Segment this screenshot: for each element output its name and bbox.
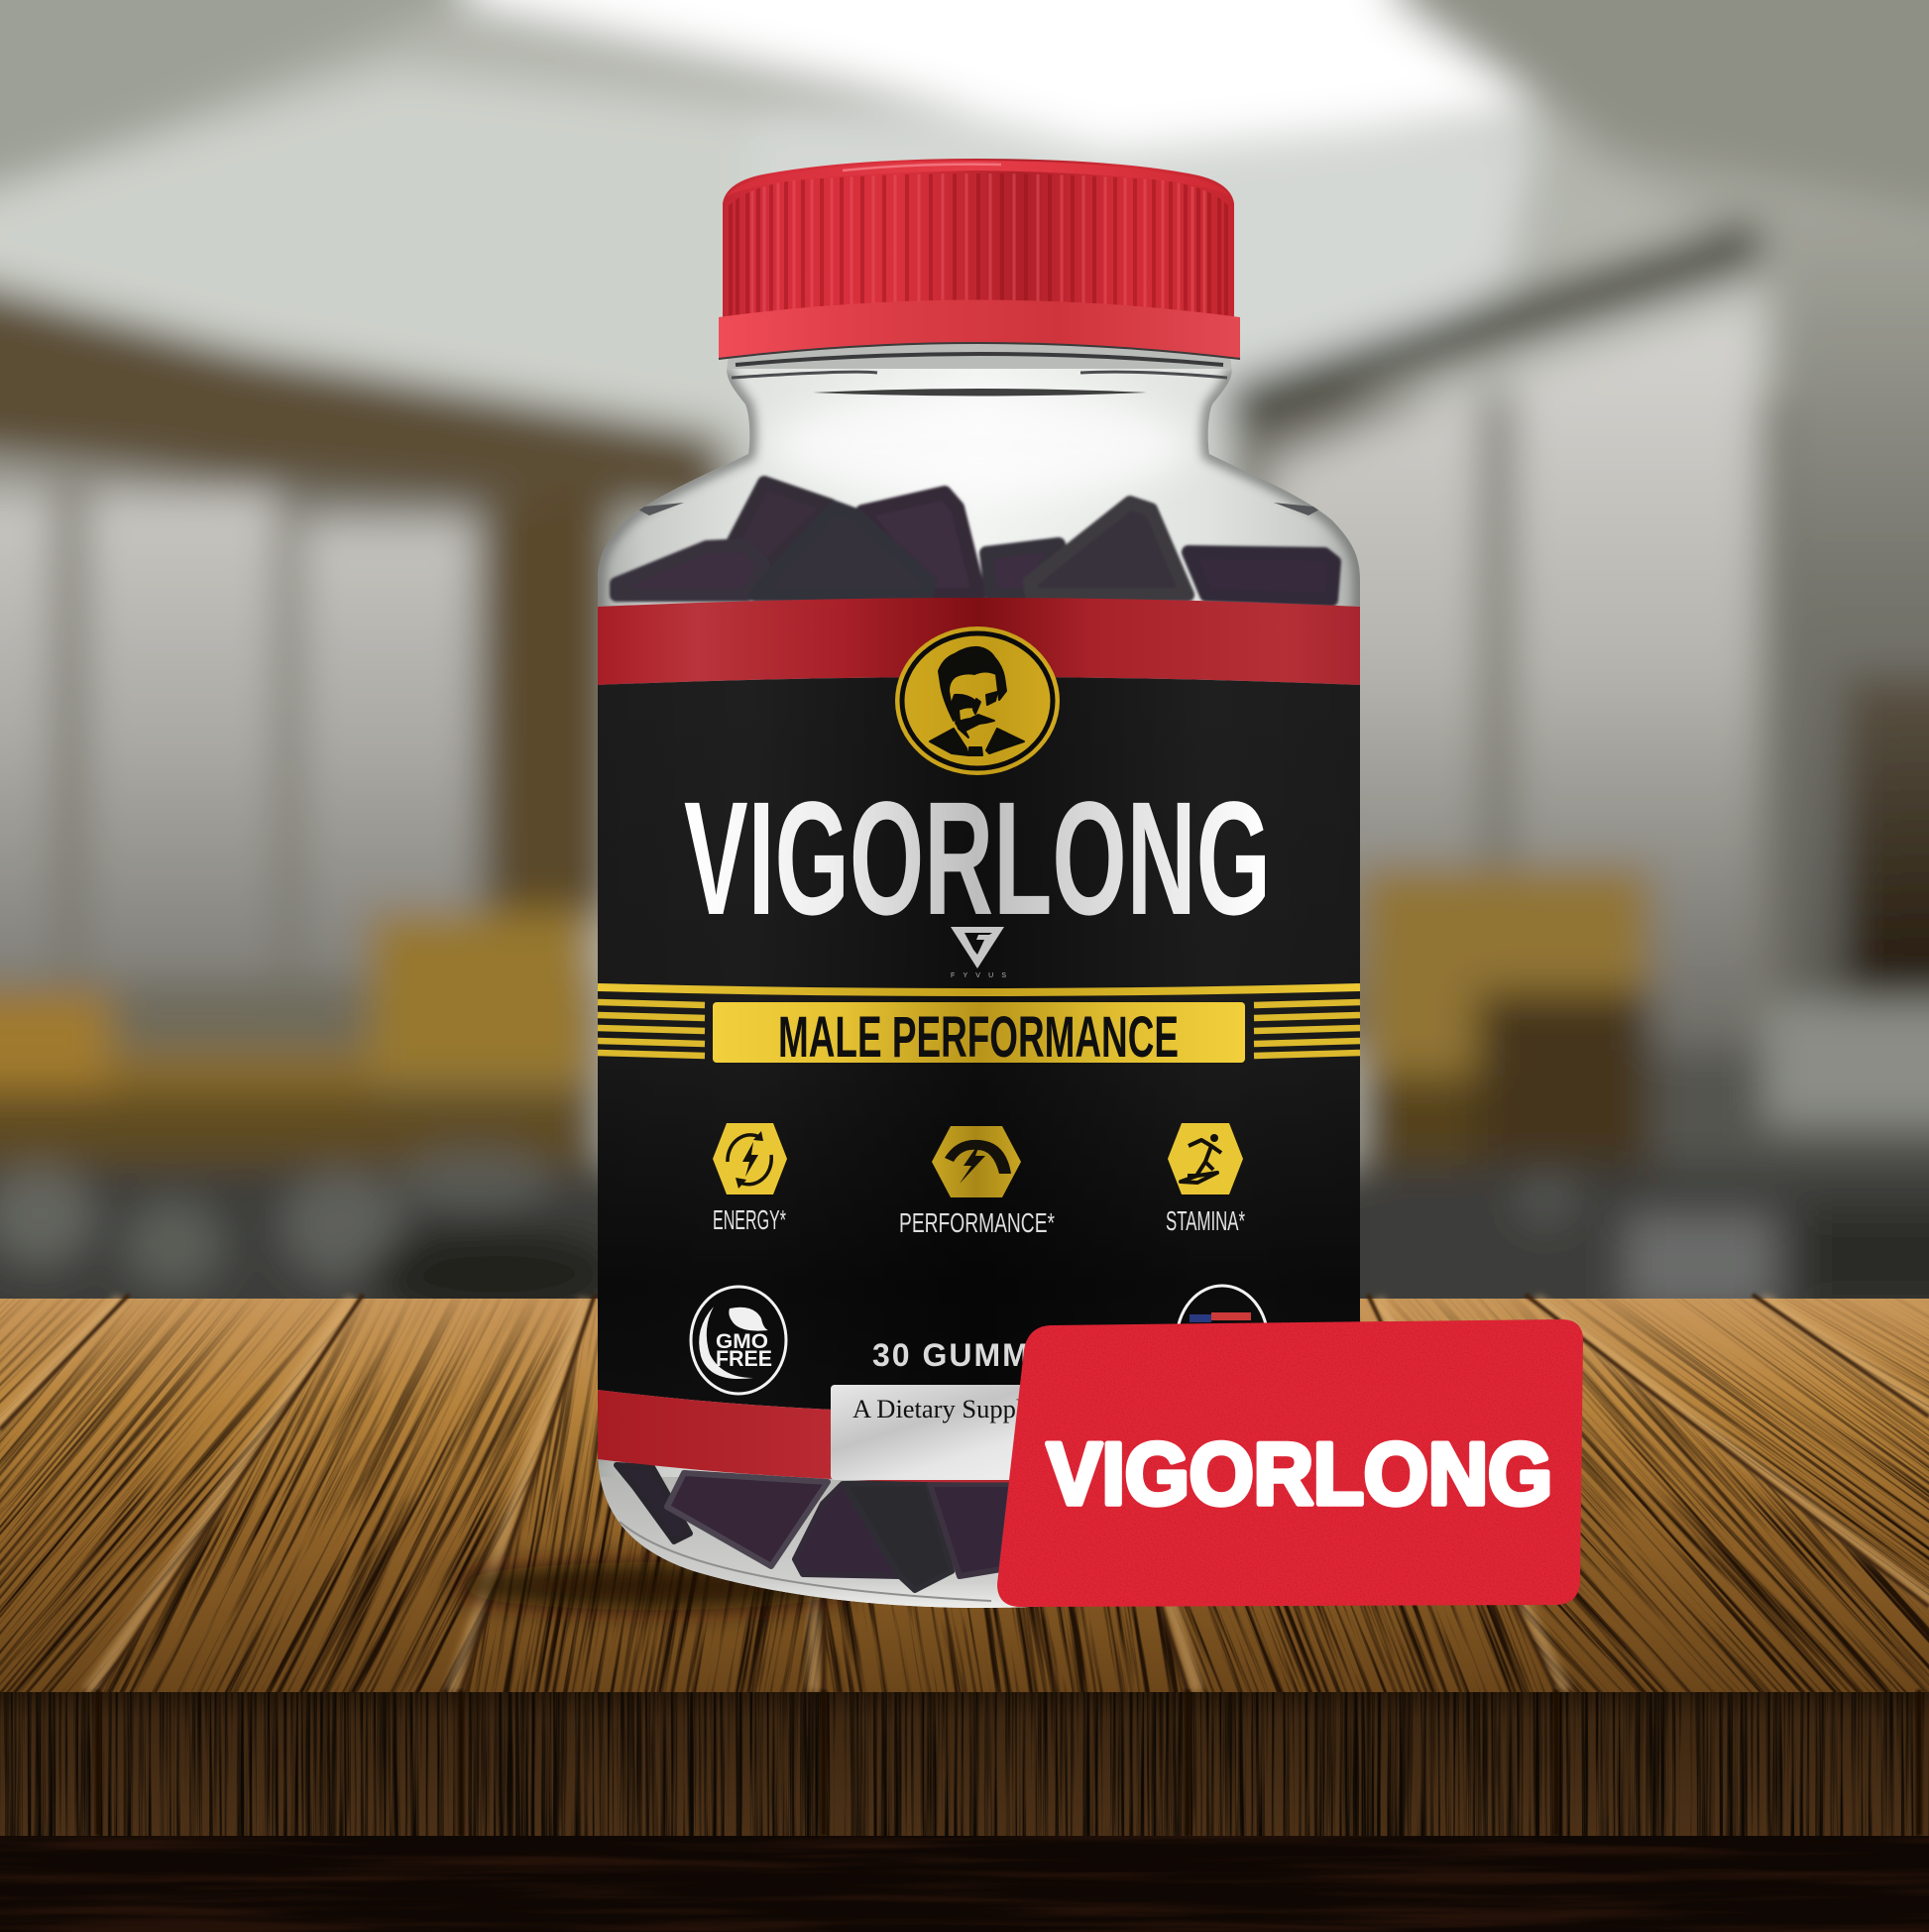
bottle xyxy=(598,159,1360,1608)
badge: GMO free xyxy=(691,1287,786,1394)
bottle shadow on table xyxy=(451,1562,857,1610)
red screw cap xyxy=(719,159,1240,359)
count text: 30 GUMMIES xyxy=(872,1337,1087,1373)
label sheen xyxy=(598,677,1360,1414)
brand title: VIGORLONG xyxy=(684,767,1271,949)
male performance banner: MALE PERFORMANCE xyxy=(778,1005,1179,1070)
white supplement-facts panel xyxy=(831,1385,1128,1480)
medallion: moustached man xyxy=(895,626,1060,775)
red brand card xyxy=(991,1313,1586,1611)
male performance banner xyxy=(713,1002,1245,1070)
label: red top band xyxy=(598,598,1360,685)
label: black body xyxy=(598,677,1360,1414)
table front edge xyxy=(0,1690,1929,1836)
gummies top xyxy=(617,483,1334,600)
dark area below table xyxy=(0,1836,1929,1932)
gummies bottom xyxy=(617,1465,1011,1590)
icon: energy xyxy=(713,1123,787,1194)
wooden table top xyxy=(0,1295,1929,1695)
badge: GMO free: FREE xyxy=(716,1346,772,1371)
label: performance: PERFORMANCE* xyxy=(899,1207,1055,1238)
card wordmark: VIGORLONG xyxy=(1047,1424,1552,1523)
badge: GMO free: GMO xyxy=(716,1330,768,1353)
icon: stamina xyxy=(1168,1123,1243,1194)
FYVUS logo xyxy=(951,927,1006,979)
label: energy: ENERGY* xyxy=(713,1204,786,1235)
badge: USA seal xyxy=(1177,1286,1268,1395)
neck threads xyxy=(727,342,1232,373)
icon: performance xyxy=(932,1126,1021,1197)
gold stripes xyxy=(598,987,1360,1056)
label: stamina: STAMINA* xyxy=(1166,1205,1245,1236)
white supplement-facts panel: A Dietary Supplement xyxy=(852,1394,1088,1423)
label: red bottom band xyxy=(598,1390,1360,1483)
clear glass jar xyxy=(598,369,1360,1608)
FYVUS logo: FYVUS xyxy=(951,972,1006,979)
